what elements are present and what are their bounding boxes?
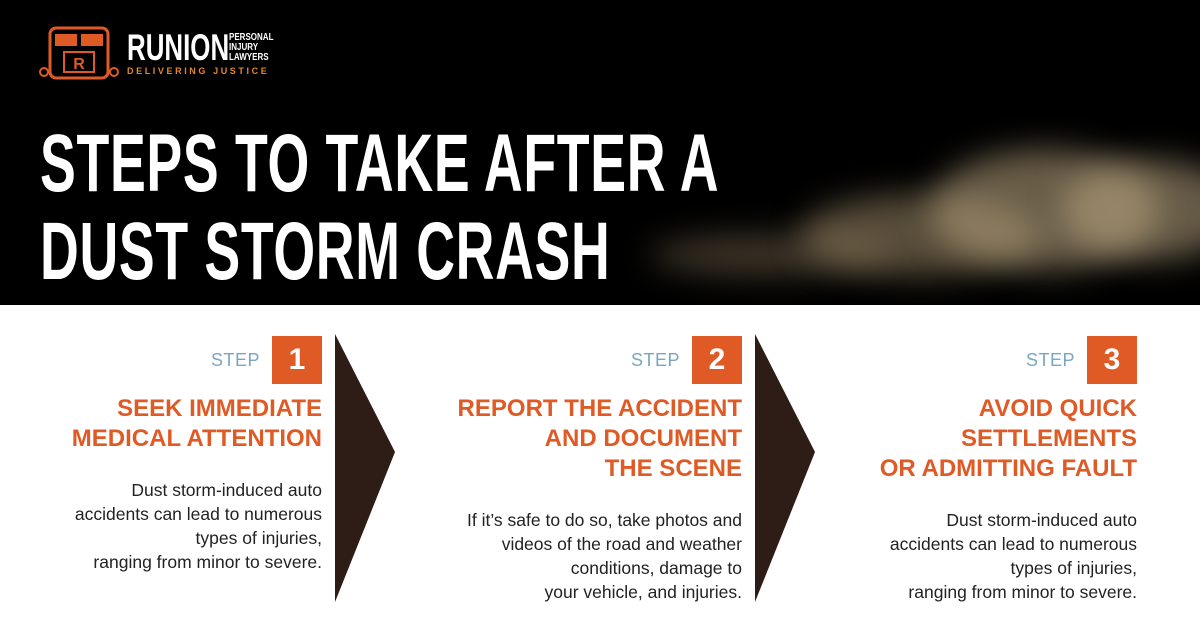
step 1: STEP (211, 350, 260, 370)
logo: LAWYERS (229, 52, 269, 63)
step 3: OR ADMITTING FAULT (880, 455, 1137, 482)
step 2: conditions, damage to (571, 558, 742, 578)
step 3: STEP (1026, 350, 1075, 370)
step 1: SEEK IMMEDIATE (117, 395, 322, 422)
step 2: your vehicle, and injuries. (545, 582, 742, 602)
step 1: types of injuries, (196, 528, 322, 548)
step 3: 3 (1104, 343, 1120, 376)
step 2: If it’s safe to do so, take photos and (467, 510, 742, 530)
step 3: Dust storm-induced auto (946, 510, 1137, 530)
icon: truck: R (73, 56, 85, 73)
step 1 (72, 336, 322, 572)
step 2: AND DOCUMENT (545, 425, 742, 452)
step 3: SETTLEMENTS (961, 425, 1137, 452)
step 3: accidents can lead to numerous (890, 534, 1137, 554)
icon: truck (39, 26, 119, 80)
step 2: REPORT THE ACCIDENT (458, 395, 742, 422)
step 2: 2 (709, 343, 725, 376)
logo (39, 26, 274, 80)
step 1: 1 (289, 343, 305, 376)
step 3 (880, 336, 1137, 602)
arrow 1 (335, 334, 395, 602)
title: STEPS TO TAKE AFTER A (40, 118, 719, 209)
step 1: MEDICAL ATTENTION (72, 425, 322, 452)
header banner (0, 0, 1200, 305)
title: DUST STORM CRASH (40, 206, 610, 297)
logo: PERSONAL (229, 32, 273, 43)
step 2 (458, 336, 742, 602)
step 3: AVOID QUICK (979, 395, 1137, 422)
logo: INJURY (229, 42, 258, 53)
arrow 2 (755, 334, 815, 602)
step 2: STEP (631, 350, 680, 370)
step 1: Dust storm-induced auto (131, 480, 322, 500)
step 3: types of injuries, (1011, 558, 1137, 578)
step 2: videos of the road and weather (502, 534, 742, 554)
logo: DELIVERING JUSTICE (127, 66, 269, 76)
step 1: accidents can lead to numerous (75, 504, 322, 524)
step 1: ranging from minor to severe. (93, 552, 322, 572)
step 2: THE SCENE (605, 455, 742, 482)
step 3: ranging from minor to severe. (908, 582, 1137, 602)
title (40, 118, 719, 297)
logo text: RUNION (127, 27, 229, 68)
